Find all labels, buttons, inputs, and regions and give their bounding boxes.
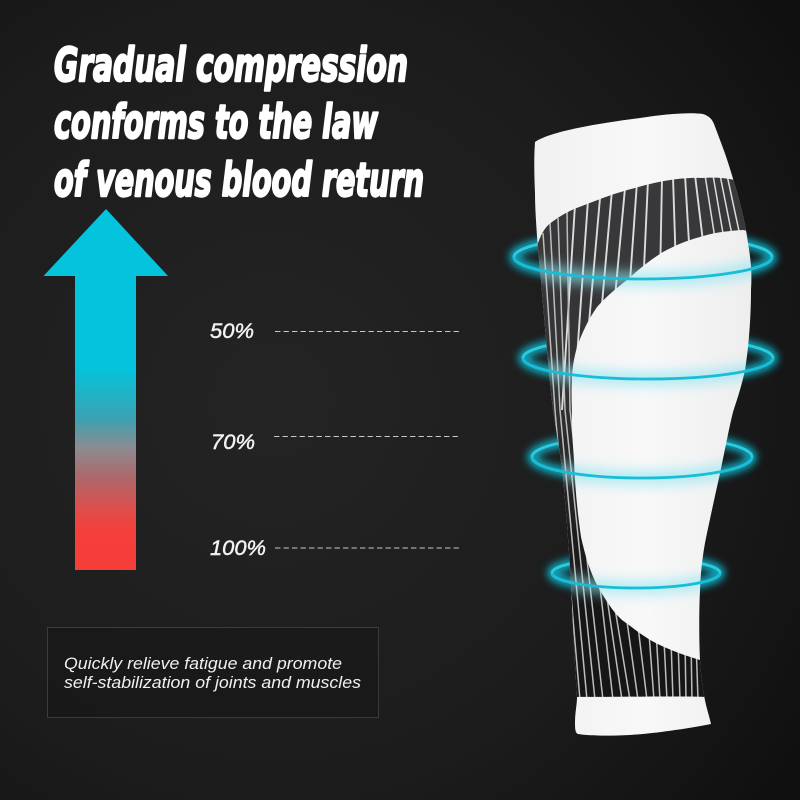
title — [54, 38, 424, 207]
ring 3 front — [532, 457, 752, 478]
gradient arrow pointing up — [44, 209, 168, 570]
text box: benefit note: self-stabilization of joints and muscles — [64, 673, 362, 692]
title: conforms to the law — [54, 95, 378, 149]
text box: benefit note — [48, 628, 378, 718]
ring light haze on sleeve — [538, 254, 752, 603]
label: 50%: 50% — [210, 320, 254, 343]
compression scale labels — [210, 320, 266, 560]
title: of venous blood return — [54, 153, 424, 207]
compression rings: back arcs behind sleeve — [514, 235, 773, 588]
compression sleeve — [534, 113, 752, 736]
ring 2 front — [523, 358, 773, 379]
title: Gradual compression — [54, 38, 408, 92]
text box: benefit note: Quickly relieve fatigue and promote — [64, 654, 342, 673]
sleeve white body — [534, 113, 752, 736]
ring 1 front — [514, 257, 772, 279]
label: 70%: 70% — [211, 431, 255, 454]
compression rings: front arcs over sleeve — [514, 257, 773, 588]
sleeve dark striped pattern — [538, 178, 752, 697]
label: 100%: 100% — [210, 537, 266, 560]
dashed leader lines — [274, 332, 460, 548]
ring 4 front — [552, 573, 720, 588]
